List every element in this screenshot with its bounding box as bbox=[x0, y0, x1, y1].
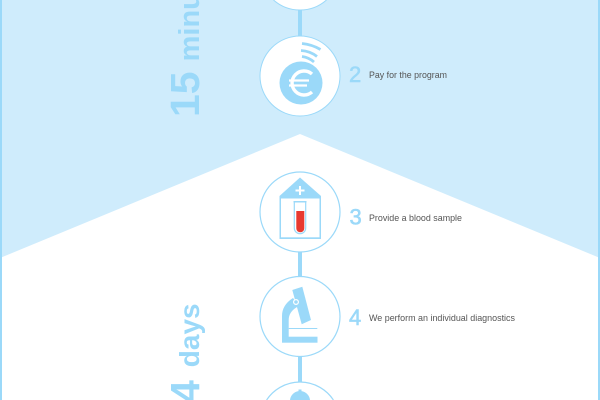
step 3 number: 3 bbox=[350, 204, 362, 230]
step 2 label: Pay for the program bbox=[369, 70, 447, 81]
step 2 number: 2 bbox=[349, 62, 361, 87]
step 1 circle outline bbox=[274, 0, 326, 10]
step 3: blood sample icon bbox=[260, 172, 340, 252]
step 4 number: 4 bbox=[349, 305, 361, 330]
step 1 circle bbox=[274, 0, 326, 10]
step 4 label: We perform an individual diagnostics bbox=[369, 313, 515, 324]
step 3 label: Provide a blood sample bbox=[369, 213, 462, 224]
step 2: euro payment icon bbox=[260, 36, 340, 116]
step 5: partial circle and icon bbox=[267, 382, 333, 400]
step 4: microscope icon bbox=[260, 276, 340, 356]
panel: blue upper background bbox=[0, 0, 600, 258]
timeline connector bbox=[298, 9, 302, 383]
